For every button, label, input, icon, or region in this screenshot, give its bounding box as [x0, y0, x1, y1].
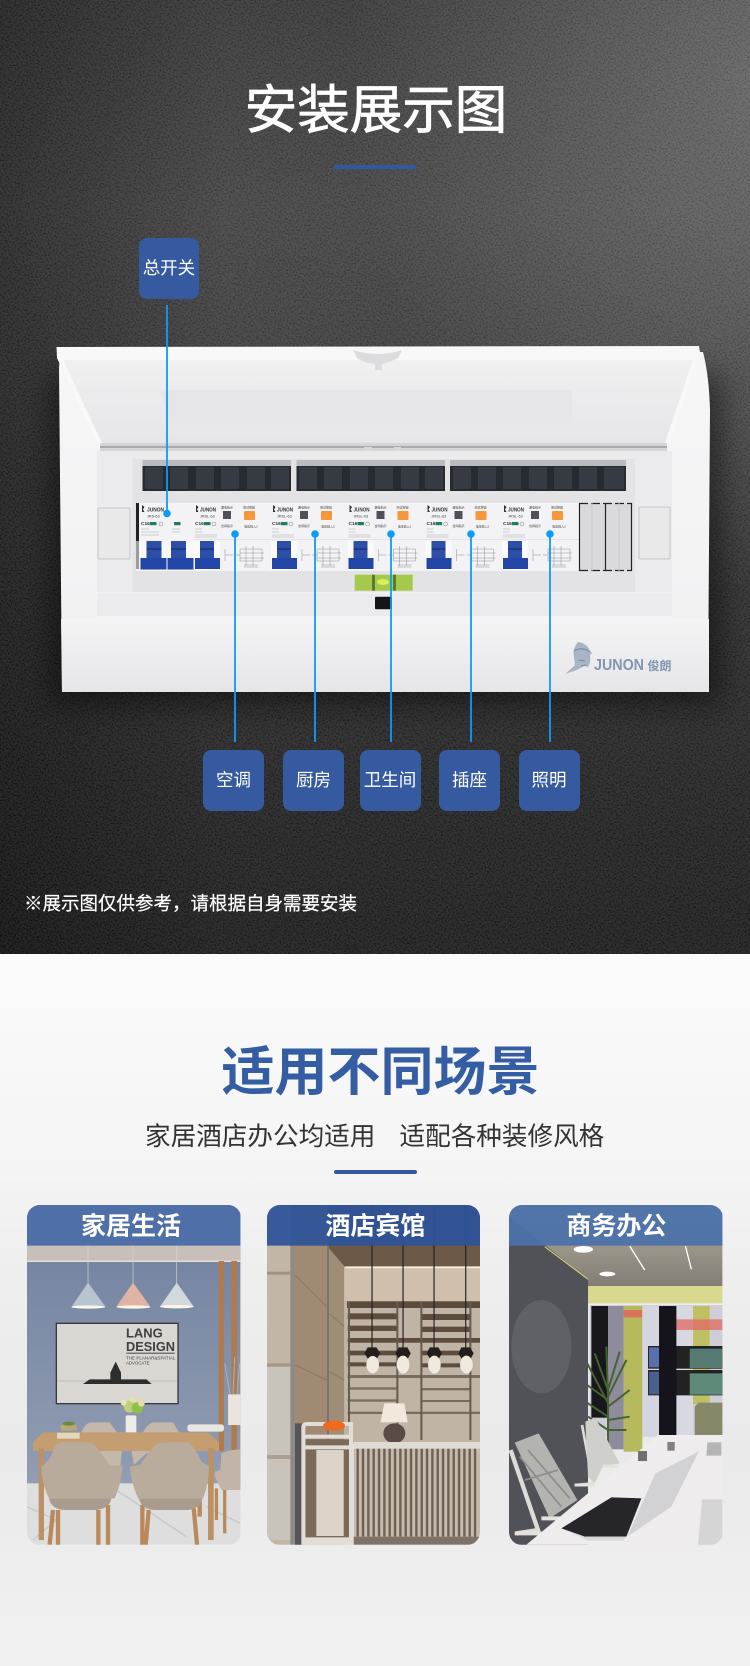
breaker module 4 [426, 503, 502, 571]
title: 安装展示图 [245, 81, 507, 140]
plant [583, 1347, 630, 1443]
monitors [648, 1346, 723, 1395]
breaker module 4: 合闸指示 [452, 523, 465, 528]
reception counter [353, 1442, 480, 1545]
tag: bathroom: 卫生间 [364, 770, 416, 790]
main breaker: JUNON [147, 508, 164, 514]
breaker module 1: 合闸指示 [221, 523, 233, 528]
yellow bulkhead [588, 1286, 723, 1303]
dark slots [142, 460, 626, 491]
scenes subtitle [145, 1123, 604, 1151]
ceiling lights [574, 1246, 692, 1276]
breaker module 2: JRSL-63 [277, 514, 292, 518]
breaker module 2: 漏电指示 [298, 504, 310, 510]
card header: 商务办公 [567, 1213, 667, 1241]
breaker module 3: JRSL-63 [354, 514, 368, 518]
framed poster: DESIGN [126, 1340, 175, 1354]
breaker module 1: 漏电指示 [221, 504, 233, 510]
books on table [57, 1422, 80, 1439]
tag: kitchen: 厨房 [296, 770, 331, 790]
mesh chair near [511, 1433, 578, 1533]
footnote: ※展示图仅供参考，请根据自身需要安装 [24, 893, 357, 914]
right clip [639, 507, 670, 559]
breaker module 3: 电压输入2 [398, 524, 412, 528]
breaker module 1 [194, 503, 271, 571]
pendant lamps [72, 1246, 194, 1309]
callout lines and dots [163, 305, 554, 742]
section: installation display [0, 0, 750, 954]
card header: 酒店宾馆 [325, 1213, 425, 1241]
breaker module 2: 测试按钮 [320, 504, 332, 510]
laptop [562, 1452, 699, 1541]
breaker module 2 [271, 503, 348, 571]
left wall panels [267, 1205, 344, 1545]
mesh chair far [575, 1418, 620, 1485]
back chair [695, 1403, 723, 1435]
breaker module 1: C16 [195, 521, 204, 527]
breaker module 3: C16 [348, 521, 358, 527]
back chairs [82, 1422, 179, 1467]
pendant lights [364, 1205, 473, 1374]
floor [27, 1483, 241, 1545]
brand logo JUNON: 俊朗 [648, 658, 672, 673]
tag: main switch: 总开关 [143, 258, 195, 278]
title underline [334, 165, 417, 169]
table lamp [380, 1403, 407, 1443]
breaker module 4: 测试按钮 [474, 504, 487, 510]
recess [97, 451, 672, 619]
side cabinet [295, 1423, 351, 1545]
table cups and pads [638, 1442, 723, 1545]
breaker module 5: JRSL-63 [508, 514, 523, 518]
scenes heading: 适用不同场景 [222, 1043, 540, 1102]
breaker module 4: JRSL-63 [432, 514, 446, 518]
left clip [98, 508, 130, 559]
glass wall [590, 1305, 723, 1452]
tag: air conditioner [203, 750, 264, 811]
upper back wall [344, 1266, 480, 1301]
right side chair [215, 1449, 241, 1533]
main breaker [136, 503, 194, 571]
open lid [56, 346, 700, 446]
ceiling [329, 1205, 480, 1267]
breaker module 2: 合闸指示 [298, 523, 310, 528]
brand logo JUNON [565, 642, 672, 674]
breaker module 5: JUNON [508, 508, 524, 514]
breaker module 3: 漏电指示 [374, 504, 387, 510]
framed poster: ADVOCATE [126, 1361, 150, 1366]
main breaker: JRS-63 [147, 514, 160, 518]
spirit level [355, 575, 413, 591]
card: business office [509, 1205, 722, 1545]
framed poster: THE PLANAR&SPATIAL [126, 1356, 176, 1361]
brand logo JUNON: JUNON [594, 657, 644, 674]
breaker module 2: 电压输入2 [321, 524, 335, 528]
black clip [375, 597, 392, 609]
breaker module 4: C16 [426, 521, 436, 527]
black column [659, 1306, 677, 1436]
breaker module 3 [348, 503, 426, 571]
breaker module 3: 测试按钮 [396, 504, 409, 510]
tag: bathroom [360, 750, 420, 811]
table [33, 1432, 219, 1540]
scenes subtitle: 适配各种装修风格 [400, 1123, 604, 1151]
breaker module 4: JUNON [432, 508, 448, 514]
card header [267, 1205, 480, 1246]
section background: applicable scenes [0, 954, 750, 1666]
card header [27, 1205, 241, 1246]
orange flowers [323, 1421, 345, 1431]
breaker module 1: JRSL-63 [200, 514, 215, 518]
wall [27, 1205, 241, 1485]
breaker module 5: 电压输入2 [552, 524, 566, 528]
box body [59, 352, 710, 692]
breaker module 5: 合闸指示 [529, 523, 541, 528]
box lower front [61, 619, 709, 692]
ceiling [509, 1205, 723, 1288]
tag: lighting [518, 750, 580, 811]
card header: 家居生活 [81, 1213, 181, 1241]
scenes underline [334, 1170, 417, 1174]
tag: lighting: 照明 [532, 770, 566, 790]
breaker module 1: 电压输入2 [244, 524, 258, 528]
breaker module 5: C16 [503, 521, 512, 527]
ceiling [27, 1243, 241, 1262]
chalk wall [509, 1217, 588, 1545]
card header [509, 1205, 723, 1246]
scenes subtitle: 家居酒店办公均适用 [145, 1123, 375, 1151]
white table [527, 1435, 723, 1545]
card: hotel [267, 1205, 480, 1545]
tag: air conditioner: 空调 [216, 770, 251, 790]
breaker module 3: 合闸指示 [374, 523, 387, 528]
breaker module 2: JUNON [277, 508, 293, 514]
wood posts [219, 1261, 237, 1451]
breaker module 5 [502, 503, 579, 571]
breaker module 5: 漏电指示 [529, 504, 541, 510]
blank fillers [579, 503, 632, 571]
breaker module 3: JUNON [354, 508, 370, 514]
tag: sockets [439, 750, 500, 811]
flowers and vase [121, 1396, 145, 1437]
hinge strip [100, 443, 667, 453]
framed poster: LANG [126, 1326, 163, 1340]
tag: kitchen [283, 750, 344, 811]
breaker module 1: JUNON [200, 508, 216, 514]
framed poster [57, 1323, 178, 1404]
side table and vase [188, 1357, 241, 1432]
front chairs [42, 1442, 209, 1545]
concrete texture [0, 0, 750, 954]
card: home living [27, 1205, 240, 1545]
tag: sockets: 插座 [452, 770, 487, 790]
shelving [344, 1301, 480, 1444]
breaker module 4: 电压输入2 [476, 524, 490, 528]
breaker module 4: 漏电指示 [452, 504, 465, 510]
main breaker: C16 [141, 521, 150, 527]
breaker module 1: 测试按钮 [243, 504, 255, 510]
breaker module 2: C16 [272, 521, 281, 527]
tag: main switch [139, 238, 199, 299]
breaker module 5: 测试按钮 [551, 504, 563, 510]
distribution box product [56, 305, 710, 742]
